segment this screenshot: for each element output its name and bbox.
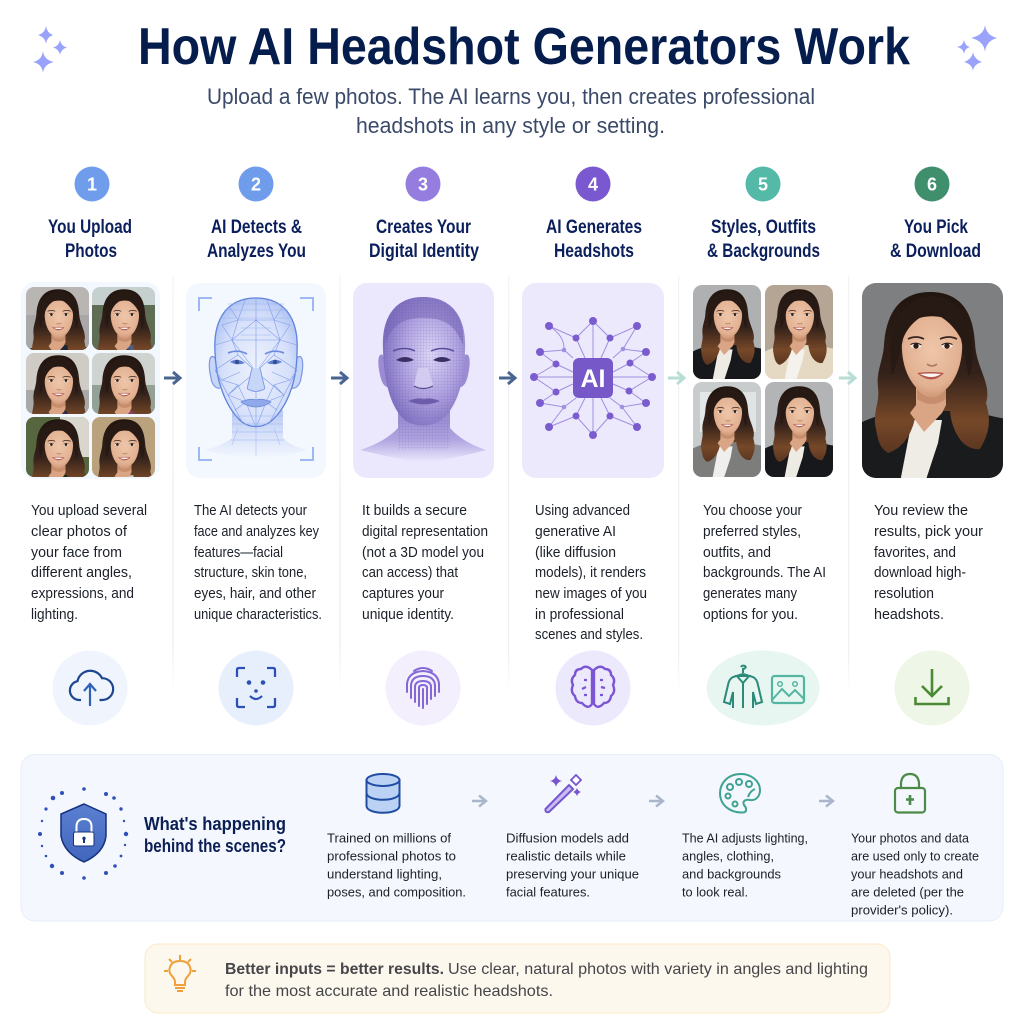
step 6 description: You review the <box>874 503 968 519</box>
icon: outfit and background <box>706 650 820 726</box>
column dividers <box>172 275 849 692</box>
icon: light bulb <box>164 955 196 991</box>
step 6 heading: & Download <box>890 241 981 262</box>
step 4 heading: AI Generates <box>546 217 642 238</box>
text: training data: poses, and composition. <box>327 884 466 900</box>
step 2 heading <box>207 217 306 262</box>
step 5 description: generates many <box>703 586 798 602</box>
icon: brain <box>556 650 630 726</box>
step 3 number <box>406 166 440 202</box>
step 4 number <box>576 166 610 202</box>
tip text <box>225 961 868 1000</box>
subtitle: headshots in any style or setting. <box>356 113 665 138</box>
step 5 description: backgrounds. The AI <box>703 565 826 581</box>
step 5 description: options for you. <box>703 607 798 623</box>
step 4 description: generative AI <box>535 524 616 540</box>
icon: sparkles right <box>957 25 997 71</box>
behind the scenes heading: What's happening <box>144 814 286 834</box>
step 6 description: results, pick your <box>874 524 983 540</box>
step 2 description: unique characteristics. <box>194 607 322 623</box>
tip text: Use clear, natural photos with variety in angles and lighting <box>448 961 868 978</box>
step 5 number: 5 <box>758 174 768 194</box>
tip text: for the most accurate and realistic headshots. <box>225 983 553 1000</box>
arrow: diffusion to adjustments <box>649 796 663 806</box>
arrow 4 <box>668 372 684 384</box>
panel: style options <box>693 285 836 483</box>
step 6 description <box>874 503 983 623</box>
text: diffusion models: Diffusion models add <box>506 830 629 846</box>
step 4 description: models), it renders <box>535 565 646 581</box>
panel: digital identity head <box>353 283 494 478</box>
step 1 description: lighting. <box>31 607 78 623</box>
step 6 number: 6 <box>927 174 937 194</box>
step 3 description: digital representation <box>362 524 488 540</box>
icon: face scan <box>218 650 294 726</box>
step 4 heading: Headshots <box>554 241 634 262</box>
step 2 description <box>194 503 322 623</box>
step 2 description: structure, skin tone, <box>194 565 307 581</box>
tip text: Better inputs = better results. <box>225 961 444 978</box>
icon: database <box>366 774 400 813</box>
text: privacy: are used only to create <box>851 848 979 864</box>
subtitle: Upload a few photos. The AI learns you, then creates professional <box>207 84 815 109</box>
text: training data: understand lighting, <box>327 866 442 882</box>
arrow 3 <box>499 372 515 384</box>
text: diffusion models <box>506 830 639 900</box>
step 1 description: different angles, <box>31 565 132 581</box>
step 3 description: It builds a secure <box>362 503 467 519</box>
step 4 description: in professional <box>535 607 624 623</box>
step 1 number <box>74 166 110 202</box>
icon: padlock <box>895 774 925 812</box>
step 3 heading: Digital Identity <box>369 241 479 262</box>
text: training data: Trained on millions of <box>327 830 451 846</box>
step 1 description: clear photos of <box>31 524 128 540</box>
step 3 heading <box>369 217 479 262</box>
step 2 description: eyes, hair, and other <box>194 586 316 602</box>
step 6 description: download high- <box>874 565 966 581</box>
step 5 heading: Styles, Outfits <box>711 217 816 238</box>
step 3 description <box>362 503 488 623</box>
text: adjustments: The AI adjusts lighting, <box>682 830 808 846</box>
step 6 description: headshots. <box>874 607 944 623</box>
step 1 heading: Photos <box>65 241 117 262</box>
arrow: adjustments to privacy <box>819 796 833 806</box>
step 6 heading <box>890 217 981 262</box>
text: privacy: your headshots and <box>851 866 963 882</box>
text: adjustments: to look real. <box>682 884 748 900</box>
icon: palette <box>720 774 760 813</box>
behind the scenes heading: behind the scenes? <box>144 836 286 856</box>
text: training data <box>327 830 466 900</box>
arrow 1 <box>164 372 180 384</box>
title: How AI Headshot Generators Work <box>138 18 910 76</box>
callout: tip <box>145 944 890 1013</box>
step 2 heading: AI Detects & <box>211 217 302 238</box>
step 2 description: features—facial <box>194 545 283 561</box>
text: diffusion models: realistic details while <box>506 848 626 864</box>
text: adjustments <box>682 830 808 900</box>
step 1 description: You upload several <box>31 503 147 519</box>
step 1 description <box>31 503 147 623</box>
step 5 description <box>703 503 826 623</box>
step 2 number <box>238 166 274 202</box>
text: adjustments: and backgrounds <box>682 866 781 882</box>
text: diffusion models: facial features. <box>506 884 590 900</box>
icon: shield with dots <box>38 787 128 880</box>
step 5 number <box>746 166 780 202</box>
arrow: training to diffusion <box>472 796 486 806</box>
text: adjustments: angles, clothing, <box>682 848 774 864</box>
step 4 description: (like diffusion <box>535 545 616 561</box>
step 6 heading: You Pick <box>904 217 968 238</box>
step 4 description: new images of you <box>535 586 647 602</box>
step 6 description: favorites, and <box>874 545 956 561</box>
step 1 description: your face from <box>31 545 122 561</box>
step 5 description: outfits, and <box>703 545 771 561</box>
step 5 heading <box>707 217 820 262</box>
icon: sparkles left <box>33 26 67 73</box>
behind the scenes heading <box>144 814 286 856</box>
text: privacy <box>851 830 979 918</box>
step 1 number: 1 <box>87 174 97 194</box>
step 5 heading: & Backgrounds <box>707 241 820 262</box>
icon: download <box>894 650 970 726</box>
panel: AI neural network: AI <box>580 365 606 393</box>
step 3 description: unique identity. <box>362 607 454 623</box>
step 3 heading: Creates Your <box>376 217 471 238</box>
step 4 description: Using advanced <box>535 503 630 519</box>
step 4 heading <box>546 217 642 262</box>
step 2 heading: Analyzes You <box>207 241 306 262</box>
panel: final headshot <box>862 283 1003 478</box>
step 4 description <box>535 503 647 643</box>
step 4 number: 4 <box>588 174 598 194</box>
arrow 5 <box>839 372 855 384</box>
step 1 heading: You Upload <box>48 217 132 238</box>
arrow 2 <box>331 372 347 384</box>
step 3 number: 3 <box>418 174 428 194</box>
step 1 heading <box>48 217 132 262</box>
step 6 number <box>914 166 950 202</box>
step 2 number: 2 <box>251 174 261 194</box>
icon: magic wand <box>545 775 581 812</box>
step 3 description: can access) that <box>362 565 458 581</box>
step 3 description: captures your <box>362 586 444 602</box>
text: diffusion models: preserving your unique <box>506 866 639 882</box>
step 6 description: resolution <box>874 586 934 602</box>
step 1 description: expressions, and <box>31 586 134 602</box>
icon: cloud upload <box>52 650 128 726</box>
step 3 description: (not a 3D model you <box>362 545 484 561</box>
step 4 description: scenes and styles. <box>535 627 643 643</box>
step 2 description: face and analyzes key <box>194 524 320 540</box>
panel: face analysis wireframe <box>186 283 326 478</box>
step 5 description: You choose your <box>703 503 802 519</box>
text: privacy: are deleted (per the <box>851 884 964 900</box>
panel: behind the scenes <box>21 754 1003 921</box>
text: training data: professional photos to <box>327 848 456 864</box>
panel: uploaded photos grid <box>21 282 160 479</box>
step 2 description: The AI detects your <box>194 503 307 519</box>
icon: fingerprint <box>386 650 460 726</box>
panel: AI neural network <box>522 283 664 478</box>
subtitle <box>207 84 815 138</box>
text: privacy: provider's policy). <box>851 902 953 918</box>
text: privacy: Your photos and data <box>851 830 970 846</box>
step 5 description: preferred styles, <box>703 524 801 540</box>
